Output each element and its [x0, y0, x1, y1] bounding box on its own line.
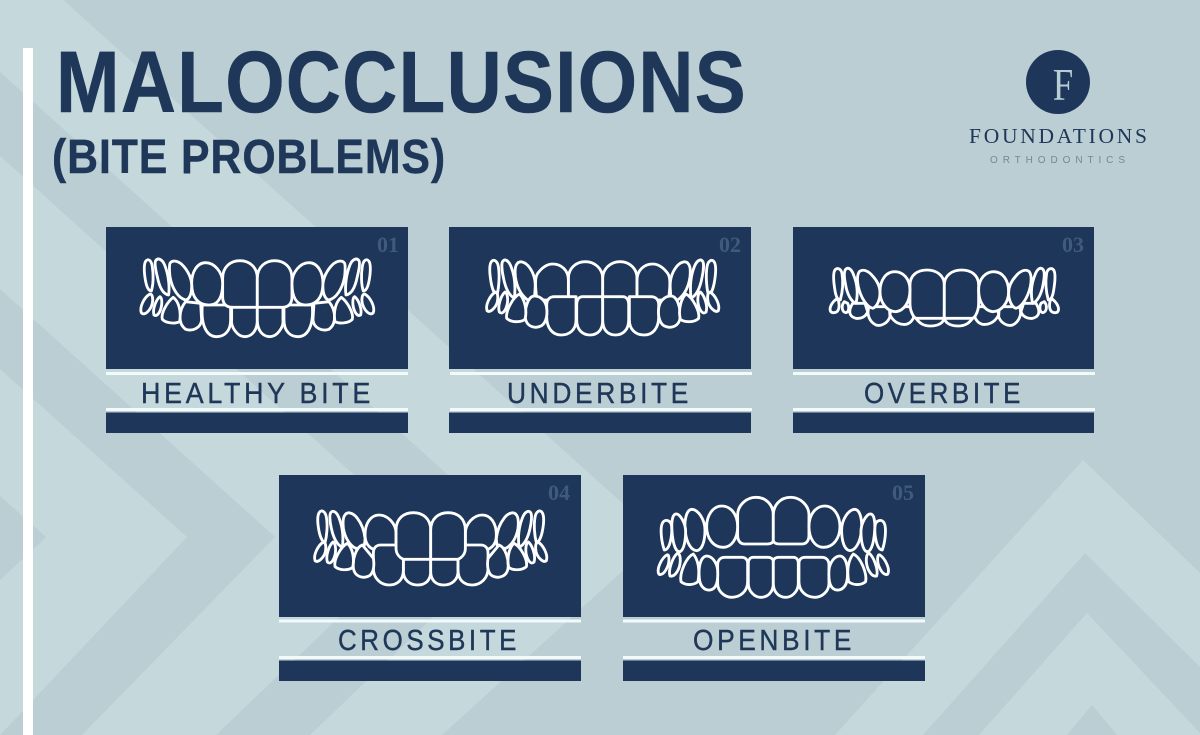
label: crossbite: CROSSBITE: [338, 625, 520, 657]
panel: crossbite: [279, 475, 581, 681]
logo tagline: ORTHODONTICS: [990, 155, 1125, 166]
number 05: 05: [892, 480, 914, 505]
number 04: 04: [548, 480, 570, 505]
panel: overbite: [793, 227, 1095, 433]
panel: healthy bite: [106, 227, 408, 433]
icon: openbite teeth: [658, 497, 888, 597]
panel: openbite: [623, 475, 925, 681]
label: overbite: OVERBITE: [864, 378, 1024, 410]
number 01: 01: [377, 232, 399, 257]
icon: healthy bite teeth: [141, 259, 374, 337]
vertical white bar: [23, 48, 33, 735]
label: healthy bite: HEALTHY BITE: [141, 378, 374, 410]
logo letter: F: [1053, 60, 1073, 111]
number 02: 02: [719, 232, 741, 257]
icon: underbite teeth: [487, 260, 719, 335]
icon: overbite teeth: [830, 268, 1059, 326]
logo emblem: [1026, 50, 1090, 114]
logo: Foundations Orthodontics: [969, 50, 1147, 166]
title: MALOCCLUSIONS: [56, 34, 747, 131]
number 03: 03: [1062, 232, 1084, 257]
label: openbite: OPENBITE: [693, 625, 855, 657]
logo name: FOUNDATIONS: [969, 124, 1147, 148]
subtitle: (BITE PROBLEMS): [52, 131, 446, 184]
panel: underbite: [449, 227, 752, 433]
icon: crossbite teeth: [315, 511, 547, 585]
label: underbite: UNDERBITE: [507, 378, 692, 410]
